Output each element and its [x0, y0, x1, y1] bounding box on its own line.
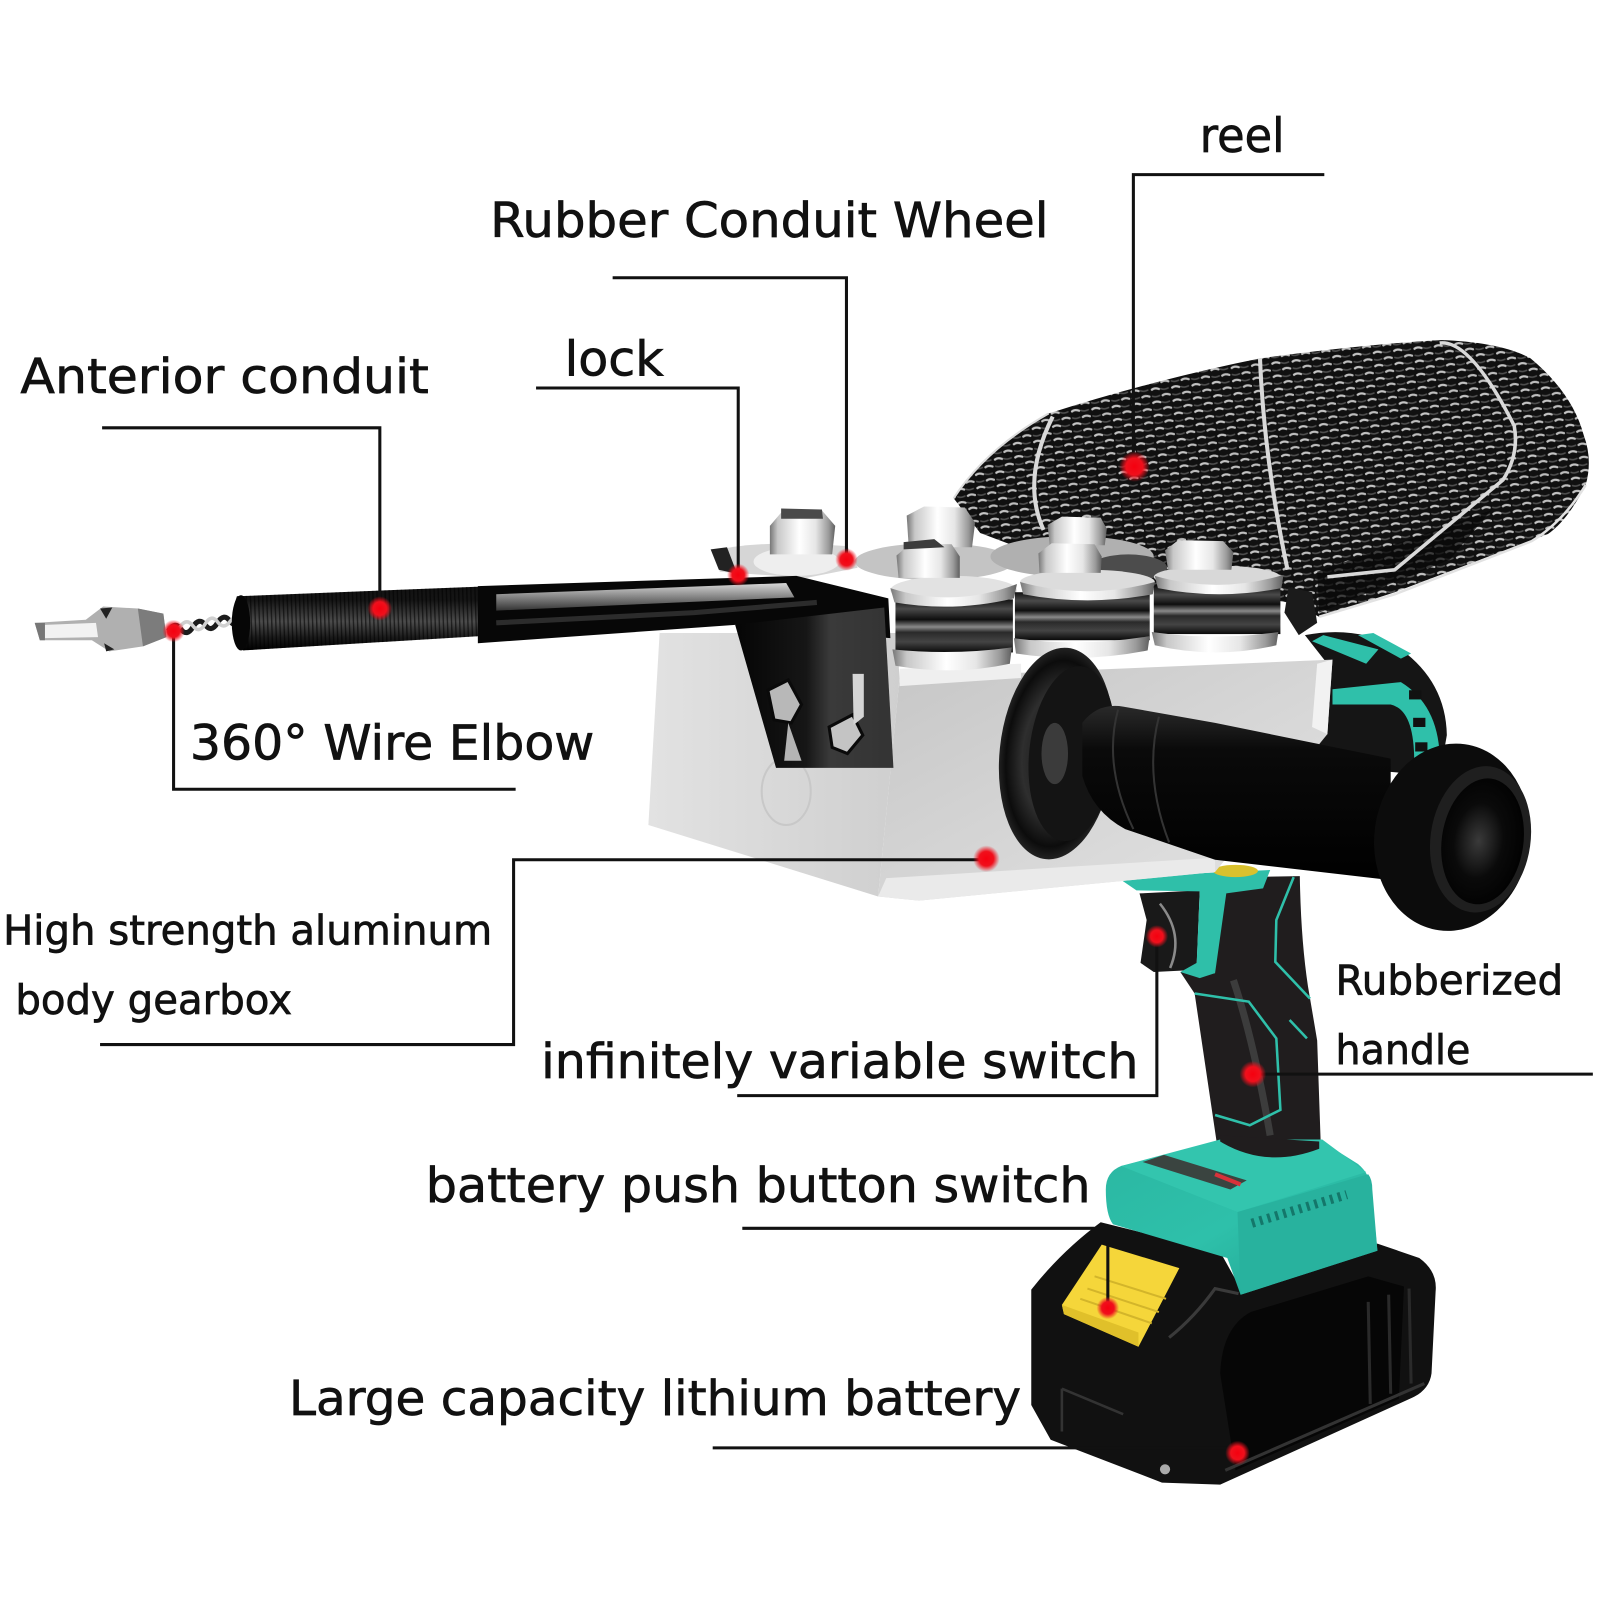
- icon: front roller one: [890, 539, 1017, 670]
- label: reel: reel: [1200, 109, 1284, 164]
- label: gearbox line one: High strength aluminum: [3, 906, 492, 954]
- icon: teal battery mount: [1106, 1135, 1377, 1295]
- icon: conduit arm: [478, 576, 890, 643]
- icon: reel clamp: [1284, 587, 1317, 635]
- icon: anterior threaded conduit: [232, 586, 496, 650]
- icon: yellow battery latch: [1062, 1245, 1179, 1347]
- icon: lithium battery pack: [1031, 1222, 1436, 1485]
- icon: wire spiral elbow: [168, 617, 242, 633]
- icon: back rollers and lock plate: [711, 506, 1167, 581]
- label: rubber conduit wheel: Rubber Conduit Wheel: [490, 193, 1049, 249]
- icon: conduit tip: [35, 607, 166, 651]
- leader: anterior conduit: [102, 428, 380, 609]
- icon: aluminum gearbox body: [648, 633, 1332, 901]
- leader: lithium battery: [713, 1446, 1238, 1449]
- label: lithium battery: Large capacity lithium battery: [289, 1371, 1021, 1427]
- leader: rubber conduit wheel: [613, 278, 846, 560]
- leader: battery push button: [742, 1228, 1108, 1308]
- label: variable switch: infinitely variable switch: [541, 1034, 1138, 1090]
- icon: motor housing: [1305, 632, 1447, 776]
- red markers: [162, 451, 1266, 1465]
- label: gearbox line two: body gearbox: [15, 976, 292, 1024]
- leader: wire elbow: [174, 631, 516, 789]
- icon: front roller two: [1014, 543, 1155, 658]
- label: handle: handle: [1336, 1026, 1470, 1074]
- icon: gun body and pistol grip: [1117, 865, 1321, 1159]
- icon: side handle: [989, 642, 1542, 941]
- label: anterior conduit: Anterior conduit: [20, 349, 429, 405]
- label: lock: lock: [565, 332, 664, 388]
- label: rubberized: Rubberized: [1336, 957, 1563, 1005]
- leader: lock: [536, 388, 738, 575]
- icon: wire reel: [954, 340, 1589, 617]
- label: battery push button switch: battery push button switch: [426, 1158, 1090, 1214]
- icon: mounting bracket: [735, 608, 893, 768]
- icon: front roller three: [1152, 540, 1283, 652]
- leader: rubberized handle: [1253, 1073, 1593, 1076]
- leader: gearbox: [100, 860, 986, 1045]
- leader lines and markers: [100, 175, 1593, 1448]
- leader: variable switch: [737, 936, 1157, 1096]
- label: 360 wire elbow: 360° Wire Elbow: [190, 716, 594, 772]
- leader: reel: [1133, 175, 1324, 467]
